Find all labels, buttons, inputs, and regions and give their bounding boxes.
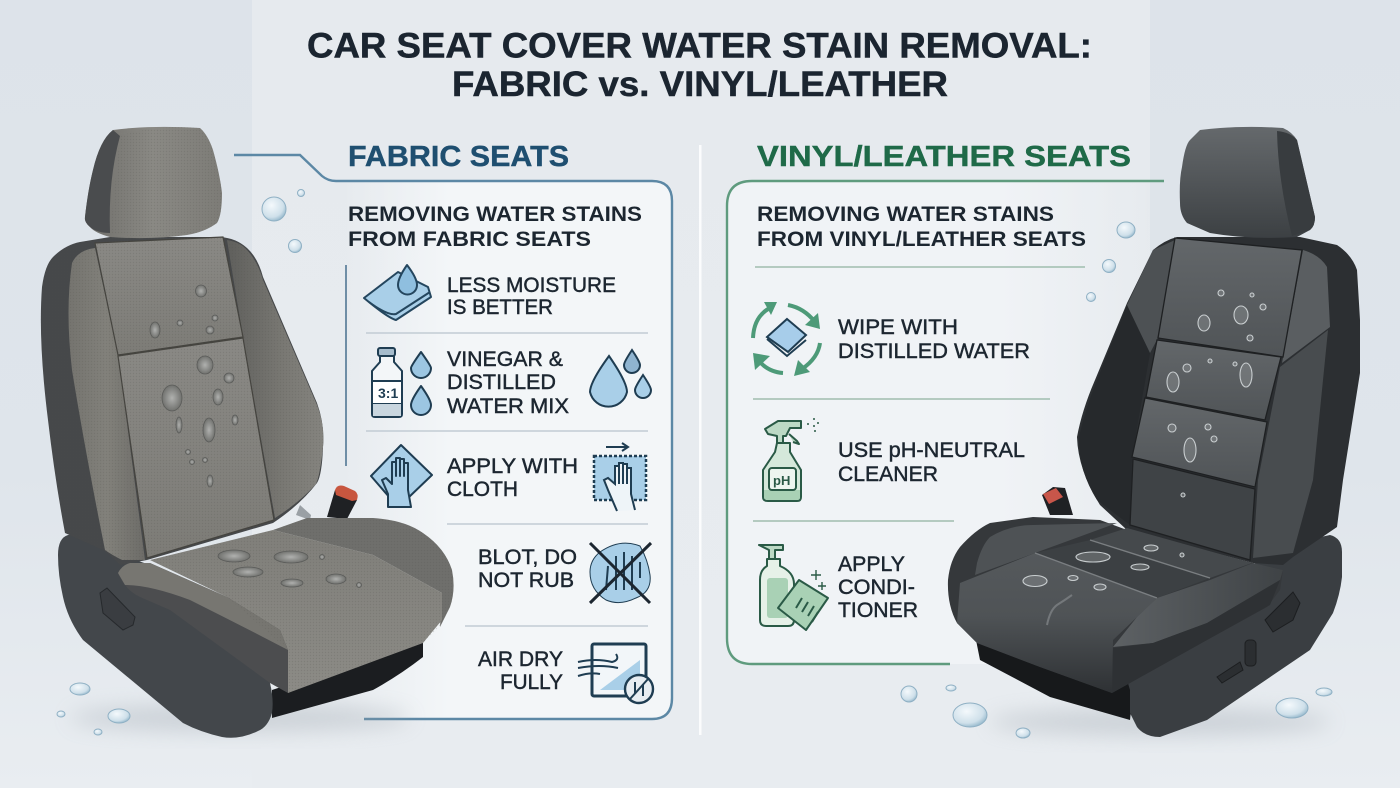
plastic base [58,535,288,738]
item: less moisture [364,265,616,320]
seat lever [100,588,135,630]
item: use pH-neutral cleaner: pH [773,473,790,488]
heading: fabric seats: FABRIC SEATS [348,141,569,173]
headrest [1180,127,1315,238]
item: blot, do not rub [478,543,651,603]
item: air dry fully: FULLY [500,671,563,694]
icon: folded towel with drop [364,265,431,320]
item: apply with cloth: CLOTH [447,478,518,501]
panel frame: fabric [234,155,672,719]
backrest [1077,237,1360,565]
belt buckle [1042,487,1073,515]
water stains: fabric [150,285,362,588]
panel: vinyl and leather seats [727,141,1164,664]
item: wipe with distilled water [753,302,1030,376]
water droplets: background [57,190,1332,738]
panel frame: vinyl [727,181,1164,664]
heading: vinyl and leather seats: VINYL/LEATHER SEATS [757,141,1131,173]
item: vinegar and distilled water mix: DISTILLED [447,371,556,394]
subheading: vinyl: FROM VINYL/LEATHER SEATS [757,227,1086,251]
item: use pH-neutral cleaner: CLEANER [838,463,938,486]
seat cushion [118,518,454,693]
center divider [699,145,702,735]
backrest [41,237,323,565]
item: vinegar and distilled water mix: VINEGAR & [447,348,563,371]
title: FABRIC vs. VINYL/LEATHER [452,64,948,104]
title: CAR SEAT COVER WATER STAIN REMOVAL: [307,26,1092,66]
item: vinegar and distilled water mix: 3:1 [378,385,398,401]
icon: hand on cloth diamond [371,445,432,507]
subheading: fabric: FROM FABRIC SEATS [348,227,591,251]
water drops: leather [1023,290,1266,590]
item: apply conditioner: TIONER [838,599,918,622]
seat cushion [948,517,1283,693]
item: blot, do not rub: NOT RUB [478,569,574,592]
item: use pH-neutral cleaner: USE pH-NEUTRAL [838,439,1025,462]
icon: spray bottle [763,421,801,501]
item: vinegar and distilled water mix [372,348,651,418]
icon: wiping motion [594,443,646,511]
leather crease [1047,595,1072,625]
dividers: vinyl [753,267,1085,521]
seat: vinyl/leather [948,127,1360,737]
accent rule and dividers: fabric [346,265,648,626]
title [307,26,1092,104]
subheading: vinyl [757,202,1086,251]
item: wipe with distilled water: DISTILLED WATER [838,340,1030,363]
panel: fabric seats [234,141,672,719]
headrest [85,127,222,238]
icon: 3:1 bottle and drops [372,348,431,417]
belt buckle [327,486,358,519]
item: apply with cloth: APPLY WITH [447,455,578,478]
item: less moisture: LESS MOISTURE [447,274,616,297]
item: use pH-neutral cleaner [763,418,1025,501]
item: air dry fully [478,644,653,703]
icon: cloth with circular arrows [753,302,820,376]
item: less moisture: IS BETTER [447,296,553,319]
item: apply with cloth [371,443,646,511]
item: apply conditioner: CONDI- [838,576,915,599]
item: air dry fully: AIR DRY [478,648,563,671]
item: wipe with distilled water: WIPE WITH [838,316,958,339]
item: apply conditioner [759,545,918,630]
item: vinegar and distilled water mix: WATER MIX [447,395,569,418]
seat lever and adjusters [1217,592,1300,683]
item: apply conditioner: APPLY [838,553,905,576]
subheading: vinyl: REMOVING WATER STAINS [757,202,1054,226]
seat underside [272,640,423,718]
subheading: fabric [348,202,642,251]
seat: fabric [41,127,454,738]
plastic base [1118,535,1342,737]
icon: window with wind and no-heat badge [578,644,653,703]
icon: water drops [590,350,651,407]
icon: crossed-out rubbing hand [590,543,651,603]
metal bracket [296,505,311,520]
subheading: fabric: REMOVING WATER STAINS [348,202,642,226]
icon: conditioner pump bottle and cloth [759,545,828,630]
item: blot, do not rub: BLOT, DO [478,546,577,569]
seat underside [975,635,1135,720]
